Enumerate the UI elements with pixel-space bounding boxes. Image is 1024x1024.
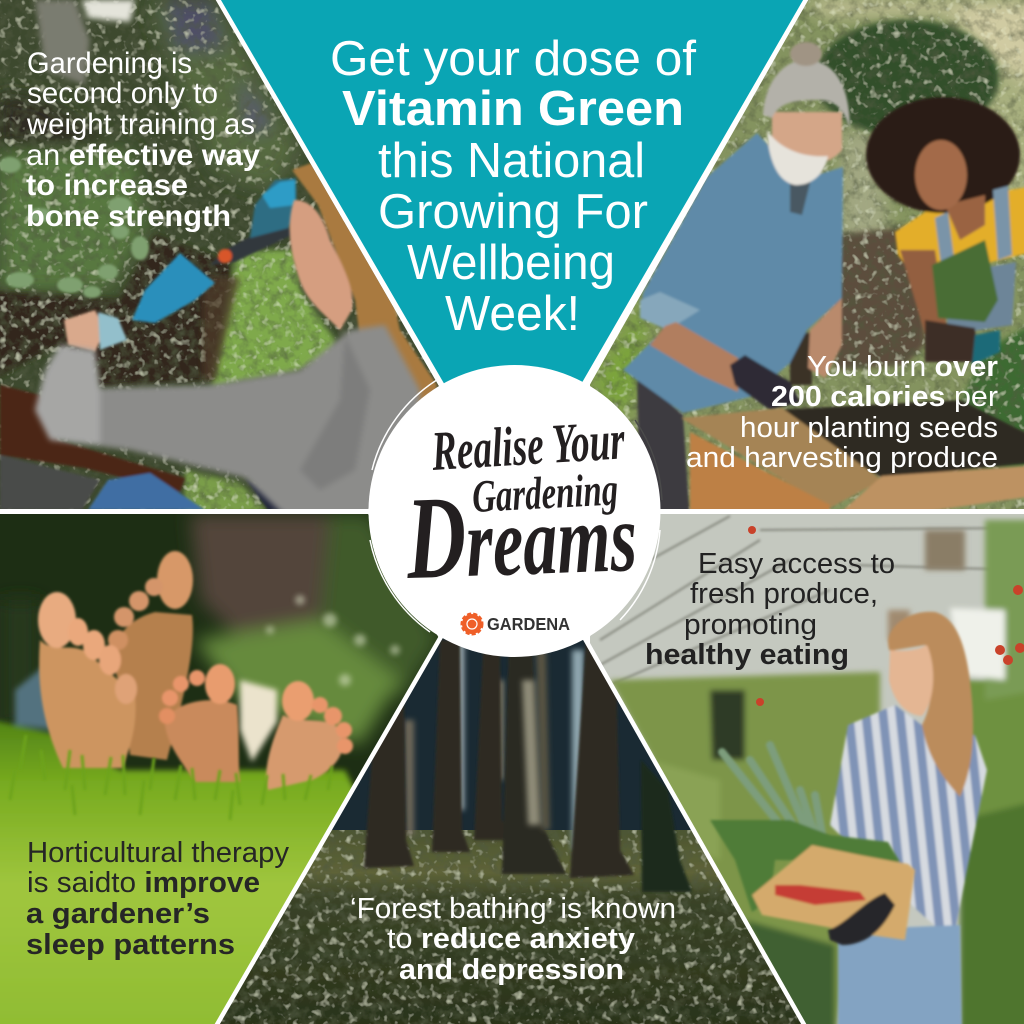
sweater arm: [35, 325, 420, 530]
woman head and hair: [290, 160, 437, 420]
panel: forest photo: [220, 638, 802, 1024]
title: Growing For: [378, 185, 648, 239]
text: sleep: a gardener’s: [26, 898, 210, 930]
logo: gardena flower: [462, 614, 482, 634]
title: this National: [378, 134, 645, 188]
grass: [0, 665, 360, 1024]
raised bed: [681, 400, 1024, 520]
text: bone strength: [26, 47, 260, 233]
foliage: [610, 520, 1024, 1024]
text: forest bathing: and depression: [399, 954, 624, 986]
grass blades: [10, 735, 332, 820]
text: bone strength: weight training as: [26, 108, 255, 141]
title: Week!: [445, 287, 580, 341]
title panel: [218, 0, 806, 505]
text: forest bathing: to reduce anxiety: [387, 923, 635, 955]
woman: [866, 97, 1024, 365]
text: calories: and harvesting produce: [686, 442, 998, 474]
tree trunks: [404, 680, 504, 835]
text: sleep: Horticultural therapy: [27, 837, 290, 869]
tomatoes: [748, 526, 1024, 706]
text: sleep: sleep patterns: [26, 929, 235, 961]
text: bone strength: to increase: [26, 169, 188, 202]
text: healthy eating: [645, 548, 895, 671]
panel: sleep photo: [0, 514, 450, 1024]
logo wordmark: GARDENA: [487, 614, 570, 634]
text: bone strength: second only to: [27, 77, 218, 110]
panel: healthy eating photo: [590, 514, 1024, 1024]
text: sleep: [26, 837, 290, 961]
script line 2: Gardening: [471, 463, 619, 522]
title: Vitamin Green: [342, 82, 684, 136]
title: Wellbeing: [407, 236, 615, 290]
text: healthy eating: Easy access to: [698, 548, 895, 580]
text: bone strength: bone strength: [26, 200, 231, 233]
text: forest bathing: [350, 893, 676, 986]
bokeh: [266, 595, 400, 686]
text: calories: [686, 351, 998, 474]
text: calories: hour planting seeds: [740, 412, 998, 444]
panel: calories photo: [590, 0, 1024, 520]
foreground leaves: [0, 157, 149, 298]
text: healthy eating: healthy eating: [645, 639, 849, 671]
text: healthy eating: promoting: [684, 609, 817, 641]
text: calories: 200 calories per: [771, 381, 998, 413]
text: sleep: is saidto improve: [27, 867, 260, 899]
panel: bone strength photo: [0, 0, 450, 530]
greenhouse roof struts: [600, 516, 1024, 685]
icon: trowel: [64, 178, 297, 352]
text: healthy eating: fresh produce,: [690, 578, 878, 610]
feet: [38, 551, 353, 790]
text: bone strength: an effective way: [26, 139, 260, 172]
planter and deck: [0, 385, 300, 510]
man: [623, 42, 850, 520]
text: forest bathing: ‘Forest bathing’ is known: [350, 893, 676, 925]
script line 3: Dreams: [404, 465, 639, 604]
title: [330, 32, 696, 341]
title: Get your dose of: [330, 32, 696, 86]
rock and sky: [35, 0, 240, 380]
text: bone strength: Gardening is: [27, 47, 192, 80]
text: calories: You burn over: [807, 351, 998, 383]
script line 1: Realise Your: [429, 409, 627, 483]
badge: realise your gardening dreams: [368, 365, 662, 657]
woman with striped shirt: [830, 612, 987, 1024]
crate of vegetables: [710, 745, 915, 945]
